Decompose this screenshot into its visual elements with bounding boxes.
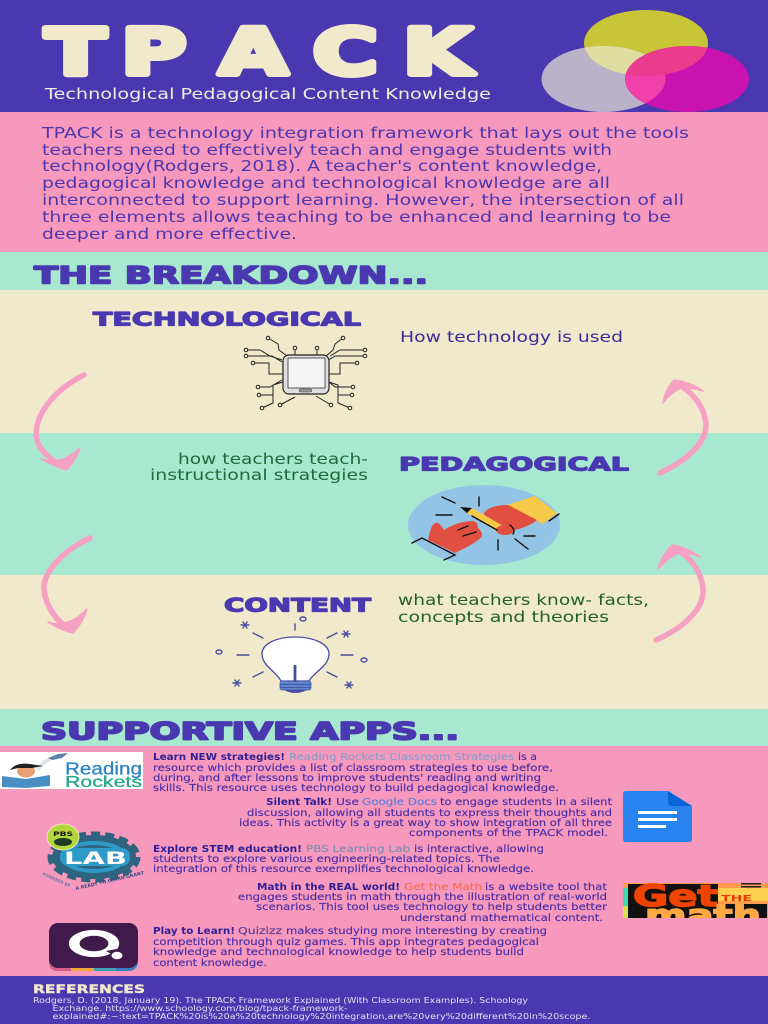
text: citation: Exchange. https://www.schoology.com/blog/tpack-framework- xyxy=(52,1004,348,1013)
panel: introduction xyxy=(0,112,768,252)
arrow: technological to pedagogical xyxy=(36,375,84,470)
text: pbs learning lab: PBS Learning Lab xyxy=(306,844,410,855)
text: google docs: Use xyxy=(336,797,359,808)
heading: references: REFERENCES xyxy=(33,982,145,996)
text: pbs learning lab: is interactive, allowing xyxy=(414,844,544,855)
text: google docs: Google Docs xyxy=(362,797,437,808)
panel: supportive apps xyxy=(0,746,768,976)
title: TPACK xyxy=(45,16,475,90)
panel: supportive apps heading xyxy=(0,709,768,746)
panel: header xyxy=(0,0,768,112)
arrow: content to pedagogical xyxy=(656,545,703,640)
text: reading rockets: Reading Rockets Classroom Strategies xyxy=(289,752,514,763)
text: quizizz: Quizizz xyxy=(238,926,282,937)
text: get the math: scenarios. This tool uses technology to help students better xyxy=(256,902,608,913)
panel: technological xyxy=(0,290,768,433)
text: quizizz xyxy=(153,926,547,969)
icon: get the math logo: Get xyxy=(633,879,718,913)
text: pbs learning lab: integration of this resource exemplifies technological knowledge. xyxy=(153,864,534,875)
text: google docs: to engage students in a silent xyxy=(440,797,612,808)
panel: introduction: teachers need to effectively teach and engage students with xyxy=(42,141,612,159)
text: get the math: engages students in math through the illustration of real-world xyxy=(238,892,607,903)
panel: introduction: interconnected to support learning. However, the intersection of all xyxy=(42,191,684,209)
text: get the math: Math in the REAL world! xyxy=(257,882,400,893)
text: get the math: Get the Math xyxy=(404,882,482,893)
icon: reading rockets logo: Reading xyxy=(65,758,142,778)
panel: supportive apps heading: SUPPORTIVE APPS... xyxy=(41,718,459,746)
icon: reading rockets logo xyxy=(0,752,143,791)
icon: pbs learning lab logo: LAB xyxy=(64,849,127,869)
icon: light bulb xyxy=(216,617,367,693)
panel: introduction: pedagogical knowledge and technological knowledge are all xyxy=(42,174,610,192)
text: pedagogical description: how teachers teach- xyxy=(178,450,368,468)
text: pedagogical description: instructional strategies xyxy=(150,466,368,484)
panel: the breakdown heading xyxy=(0,252,768,290)
heading: technological: TECHNOLOGICAL xyxy=(93,310,361,330)
icon: reading rockets logo: Rockets xyxy=(65,774,142,791)
text: citation: Rodgers, D. (2018, January 19). The TPACK Framework Explained (With Classroom Examples). Schoology xyxy=(33,996,528,1005)
panel: introduction: deeper and more effective. xyxy=(42,225,297,243)
icon: google docs xyxy=(623,791,692,842)
icon: pbs learning lab logo: PBS xyxy=(53,831,73,838)
text: get the math: is a website tool that xyxy=(485,882,607,893)
text: google docs: components of the TPACK model. xyxy=(409,828,608,839)
text: content description: what teachers know- facts, xyxy=(398,591,649,609)
text: reading rockets: is a xyxy=(518,752,537,763)
text: pedagogical description xyxy=(150,450,368,484)
text: google docs: Silent Talk! xyxy=(266,797,332,808)
text: pbs learning lab: Explore STEM education! xyxy=(153,844,302,855)
text: google docs: discussion, allowing all students to express their thoughts and xyxy=(247,808,612,819)
heading: content: CONTENT xyxy=(224,596,372,616)
icon: get the math logo: math xyxy=(645,899,761,934)
icon: get the math logo: THE xyxy=(721,894,752,903)
text: google docs: ideas. This activity is a great way to show integration of all three xyxy=(239,818,612,829)
panel: introduction: technology(Rodgers, 2018). A teacher's content knowledge, xyxy=(42,157,602,175)
text: pbs learning lab xyxy=(153,844,544,875)
text: technological description: How technology is used xyxy=(400,328,623,346)
arrow: pedagogical to technological xyxy=(660,380,706,473)
text: pbs learning lab: students to explore various engineering-related topics. The xyxy=(153,854,500,865)
text: quizizz: competition through quiz games. This app integrates pedagogical xyxy=(153,937,539,948)
text: reading rockets: during, and after lessons to improve students' reading and writing xyxy=(153,773,541,784)
icon: pbs learning lab logo xyxy=(42,824,146,892)
text: content description: concepts and theories xyxy=(398,608,609,626)
text: citation: explained#:~:text=TPACK%20is%20a%20technology%20integration,are%20very%20different%20in%20scope. xyxy=(52,1012,590,1021)
icon: get the math logo xyxy=(623,883,768,918)
icon: quizizz logo xyxy=(49,923,138,971)
text: reading rockets: skills. This resource uses technology to build pedagogical knowledge. xyxy=(153,783,559,794)
text: quizizz: Play to Learn! xyxy=(153,926,235,937)
panel: the breakdown heading: THE BREAKDOWN... xyxy=(34,262,428,290)
text: reading rockets: resource which provides a list of classroom strategies to use before, xyxy=(153,763,553,774)
text: get the math: understand mathematical content. xyxy=(400,913,603,924)
heading: pedagogical: PEDAGOGICAL xyxy=(399,454,629,476)
subtitle: Technological Pedagogical Content Knowledge xyxy=(44,85,491,103)
icon: pbs learning lab logo: A READY TO LEARN GRANT xyxy=(75,870,146,892)
panel: references xyxy=(0,976,768,1024)
text: reading rockets: Learn NEW strategies! xyxy=(153,752,285,763)
panel: pedagogical xyxy=(0,433,768,575)
panel: content xyxy=(0,575,768,709)
panel: introduction: TPACK is a technology integration framework that lays out the tools xyxy=(41,124,689,142)
text: content description xyxy=(398,591,649,626)
icon: pbs learning lab logo: POWERED BY xyxy=(42,871,72,888)
text: quizizz: makes studying more interesting by creating xyxy=(286,926,547,937)
icon: phone circuit xyxy=(244,336,367,410)
text: quizizz: content knowledge. xyxy=(153,958,267,969)
text: google docs xyxy=(239,797,612,839)
icon: hands passing pencil xyxy=(408,485,560,565)
panel: introduction: three elements allows teaching to be enhanced and learning to be xyxy=(42,208,671,226)
arrow: pedagogical to content xyxy=(44,538,90,633)
text: reading rockets xyxy=(153,752,559,794)
icon: venn diagram xyxy=(542,10,749,112)
text: get the math xyxy=(238,882,608,924)
text: quizizz: knowledge and technological knowledge to help students build xyxy=(153,947,524,958)
text: citation xyxy=(33,996,590,1021)
